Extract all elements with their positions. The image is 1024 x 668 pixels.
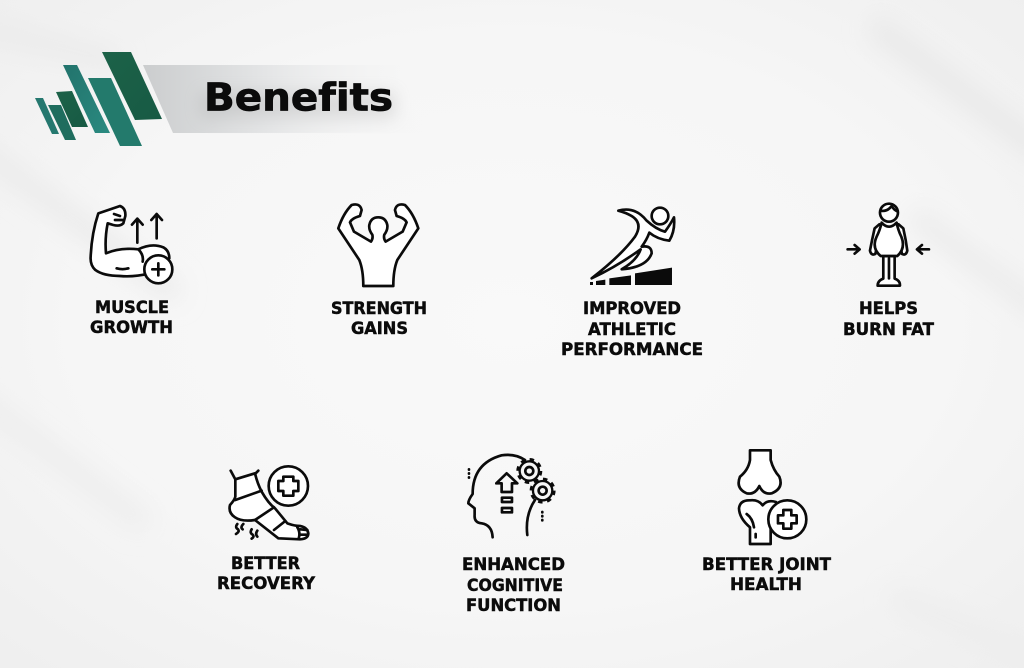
gear two — [531, 479, 554, 502]
label: HELPS — [859, 299, 918, 318]
label: COGNITIVE — [467, 576, 563, 595]
label: PERFORMANCE — [561, 340, 703, 359]
banner ribbon — [143, 65, 425, 133]
logo bars — [35, 52, 162, 146]
label: IMPROVED — [583, 299, 681, 318]
label — [462, 555, 565, 615]
icon: knee joint with cross — [739, 450, 806, 544]
label: GROWTH — [90, 318, 173, 337]
item: improved athletic performance — [561, 208, 703, 359]
icon: head with gears and up arrow — [468, 455, 554, 537]
label: RECOVERY — [217, 574, 316, 593]
item: muscle growth — [90, 206, 173, 337]
label: STRENGTH — [331, 299, 427, 318]
icon: sprinter on rising steps — [590, 208, 674, 285]
label: ENHANCED — [462, 555, 565, 574]
label: FUNCTION — [466, 596, 561, 615]
item: enhanced cognitive function — [462, 455, 565, 615]
label: ATHLETIC — [588, 320, 676, 339]
icon: bandaged foot with cross — [230, 466, 308, 539]
icon: figure with inward arrows — [848, 204, 929, 286]
label — [217, 554, 316, 593]
label: BURN FAT — [843, 320, 935, 339]
label — [702, 555, 832, 594]
title banner — [143, 65, 425, 133]
item: better recovery — [217, 466, 316, 593]
label — [90, 298, 173, 337]
label: GAINS — [351, 319, 408, 338]
icon: flexed arm with plus — [91, 206, 172, 283]
heading: Benefits — [204, 76, 393, 120]
label: BETTER JOINT — [702, 555, 832, 574]
title shadow — [200, 92, 395, 118]
item: better joint health — [702, 450, 832, 594]
item: strength gains — [331, 204, 427, 338]
gear one — [518, 460, 541, 482]
label: MUSCLE — [95, 298, 169, 317]
icon: flexing torso — [338, 204, 418, 286]
label — [331, 299, 427, 338]
label: HEALTH — [730, 575, 802, 594]
label — [843, 299, 935, 339]
label — [561, 299, 703, 359]
label: BETTER — [231, 554, 300, 573]
item: helps burn fat — [843, 204, 935, 339]
